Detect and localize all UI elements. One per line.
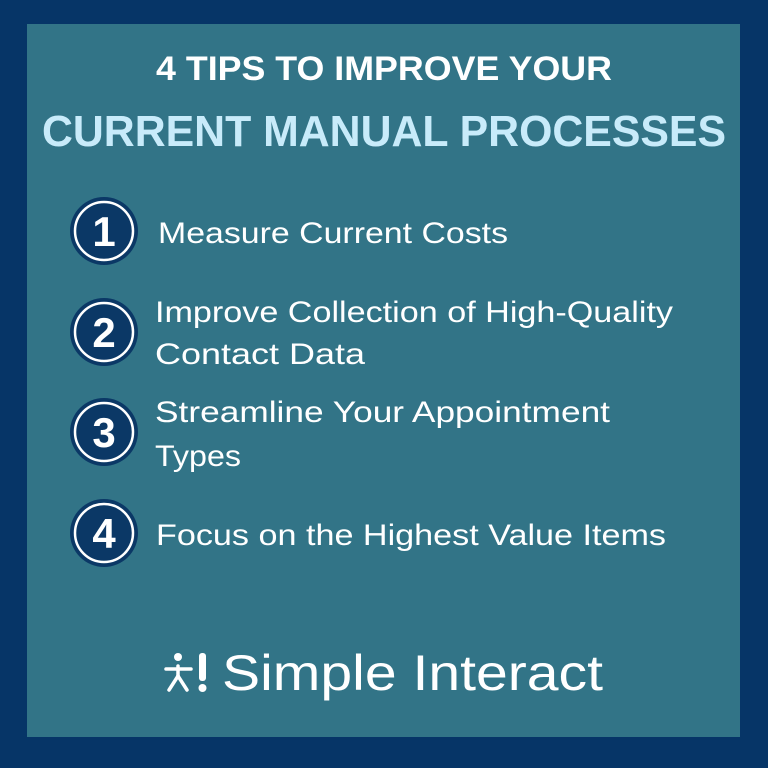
icon: number 4: 4 [92,510,116,557]
tip 2: Improve Collection of High-Quality [155,296,673,329]
tip 3: Streamline Your Appointment [155,396,611,429]
icon: stick figure [166,653,191,690]
tip 1 [70,197,508,265]
logo: Simple Interact [222,645,603,701]
icon: number 3: 3 [92,409,116,456]
icon: number 1 [70,197,138,265]
tip 1: Measure Current Costs [158,217,508,250]
title [42,50,726,156]
title: 4 TIPS TO IMPROVE YOUR [156,50,612,88]
title: CURRENT MANUAL PROCESSES [42,107,726,156]
tip 2 [70,296,673,371]
icon: exclamation [198,653,206,692]
icon: number 2: 2 [92,309,116,356]
tip 2: Contact Data [155,338,365,371]
tip 3 [70,396,611,473]
icon: number 4 [70,499,138,567]
tip 4: Focus on the Highest Value Items [156,519,666,552]
icon: number 1: 1 [92,208,116,255]
icon: number 2 [70,298,138,366]
tip 4 [70,499,666,567]
icon: number 3 [70,398,138,466]
tip 3: Types [155,440,241,473]
